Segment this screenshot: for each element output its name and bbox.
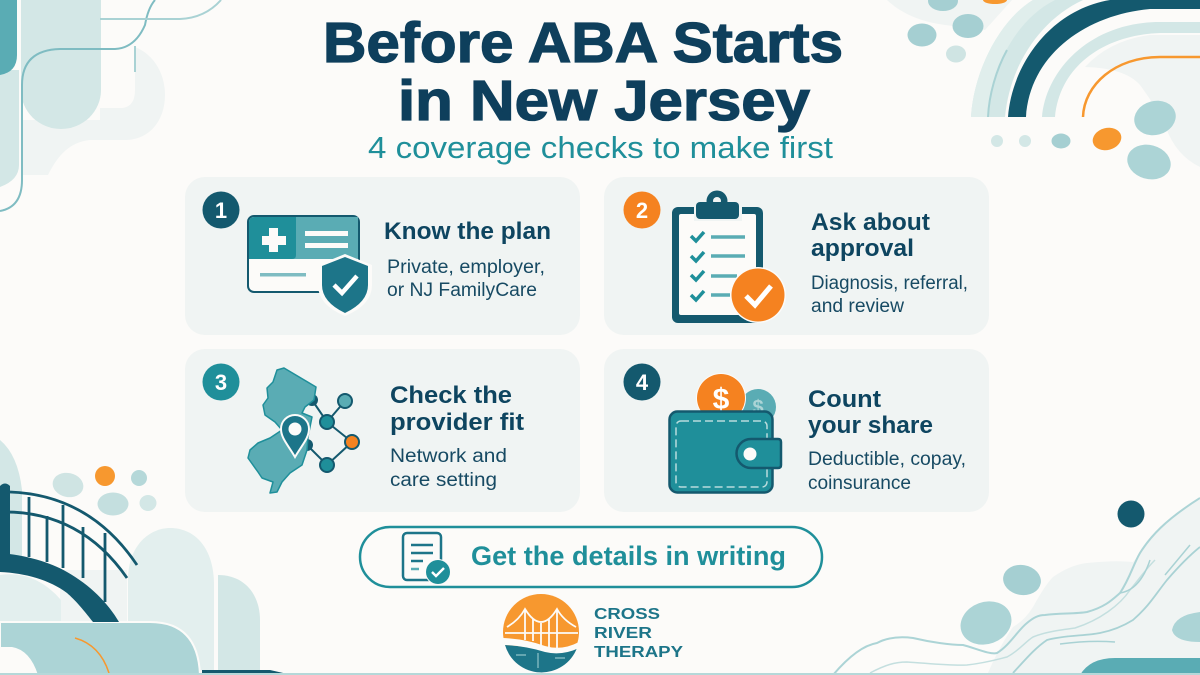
step 2 text [811, 209, 968, 317]
decoration: bottom-left bridge and shapes [0, 440, 292, 675]
callout: get the details in writing [360, 527, 822, 587]
icon: document with check [403, 533, 451, 585]
step number 4 [624, 364, 660, 400]
title: in New Jersey [398, 69, 810, 133]
logo wordmark: CROSS [594, 606, 660, 623]
title [323, 11, 843, 133]
step 4 text: Deductible, copay, [808, 449, 966, 470]
decoration: top-right arcs and blobs [887, 0, 1200, 184]
icon: wallet with coins: $ [752, 397, 764, 419]
step 3 text: provider fit [390, 409, 524, 436]
callout text: Get the details in writing [471, 541, 786, 571]
step 1 text: or NJ FamilyCare [387, 280, 537, 301]
step 3 text: Network and [390, 446, 507, 467]
logo wordmark: THERAPY [594, 644, 683, 661]
step number 1: 1 [215, 198, 227, 223]
step 4 text [808, 386, 966, 494]
step 1 text: Private, employer, [387, 257, 545, 278]
step 1 text: Know the plan [384, 218, 551, 245]
decoration: bottom-right waves and blobs [0, 498, 1200, 675]
step number 3 [202, 364, 240, 400]
step number 2: 2 [636, 198, 648, 223]
logo mark: bridge in circle [503, 594, 579, 672]
step 2 text: Diagnosis, referral, [811, 273, 968, 294]
subtitle: 4 coverage checks to make first [368, 130, 833, 165]
icon: clipboard with checklist [672, 190, 786, 323]
step 2 text: and review [811, 296, 904, 317]
decoration: top-left shapes [0, 0, 221, 211]
panel: step 1 know the plan [185, 177, 580, 335]
step 3 text [390, 382, 524, 491]
logo: Cross River Therapy [503, 594, 683, 672]
step 4 text: your share [808, 412, 933, 439]
step 2 text: Ask about [811, 209, 930, 236]
panel: step 3 check the provider fit [185, 349, 580, 512]
icon: wallet with coins [670, 373, 781, 492]
step 4 text: Count [808, 386, 881, 413]
step number 2 [624, 192, 660, 228]
step number 3: 3 [215, 370, 227, 395]
logo wordmark: RIVER [594, 625, 653, 642]
icon: New Jersey map with pin and network [248, 368, 359, 493]
step 3 text: care setting [390, 470, 497, 491]
logo wordmark [594, 606, 683, 661]
icon: wallet with coins: $ [713, 383, 730, 416]
panel: step 2 ask about approval [604, 177, 989, 335]
panel: step 4 count your share [604, 349, 989, 512]
step 2 text: approval [811, 235, 914, 262]
step 3 text: Check the [390, 382, 512, 409]
icon: insurance card with shield [248, 216, 372, 316]
step 1 text [384, 218, 551, 301]
step 4 text: coinsurance [808, 473, 911, 494]
title: Before ABA Starts [323, 11, 843, 75]
step number 1 [202, 192, 240, 228]
step number 4: 4 [636, 370, 649, 395]
